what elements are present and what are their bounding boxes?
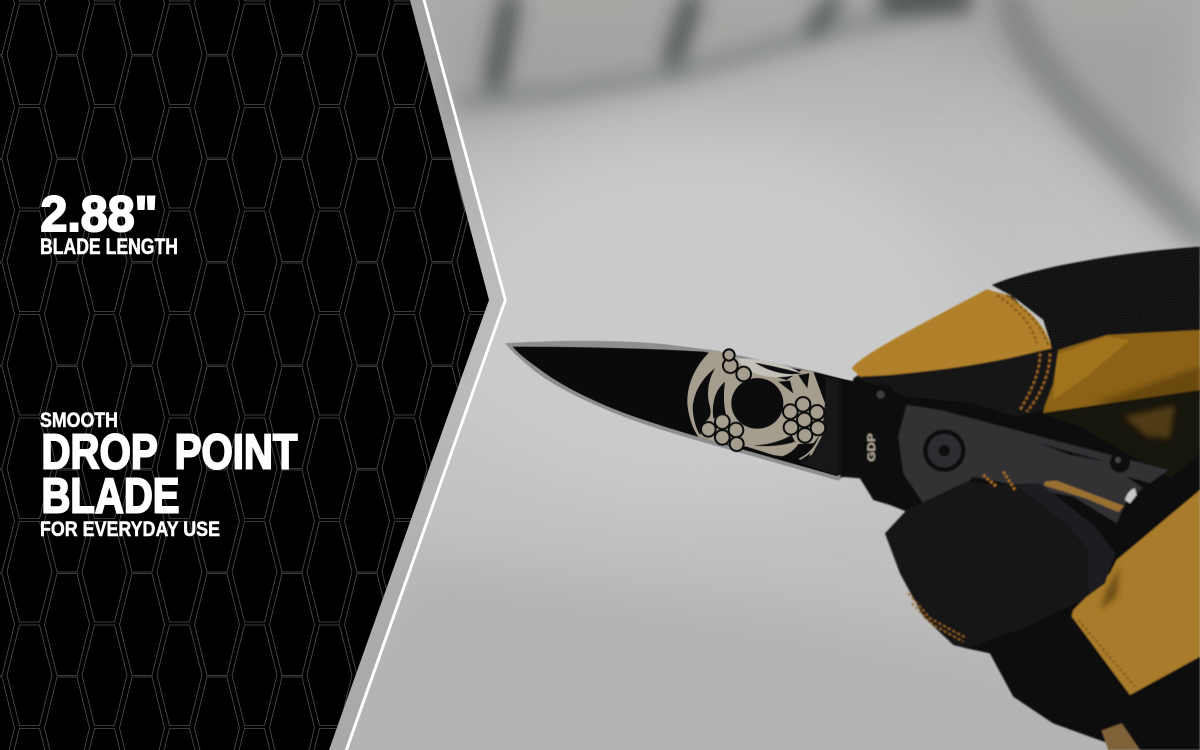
brand mark on blade: GDP: [866, 433, 878, 462]
cuff stitches: [1078, 620, 1135, 687]
feature: drop point blade: [40, 408, 298, 541]
knife handle: [885, 405, 1168, 523]
cuff suede: [1071, 490, 1200, 695]
heading: drop point: DROP POINT: [42, 424, 298, 480]
index fingertip suede: [852, 289, 1052, 377]
white chevron line: [345, 0, 507, 750]
index fingertip leather: [857, 350, 1058, 417]
value: 2.88 inches: 2.88": [40, 186, 158, 242]
lower palm: [990, 615, 1200, 750]
photo: gloved hand holding knife handle: [840, 247, 1200, 750]
handle tan accent: [1044, 481, 1124, 512]
thumb: [885, 472, 1115, 648]
blade etched logo: [687, 349, 825, 460]
panel: black chevron with hexagon pattern: [0, 0, 489, 750]
fingertip stitches: [997, 295, 1050, 412]
label: blade length: BLADE LENGTH: [40, 234, 178, 259]
stat: blade length: [40, 186, 178, 259]
chevron gray band: [329, 0, 505, 750]
glove back mesh: [992, 247, 1200, 352]
handle screws: [870, 384, 1130, 473]
heading: blade: BLADE: [42, 468, 180, 524]
logo mark on handle: [1125, 488, 1137, 503]
label: for everyday use: FOR EVERYDAY USE: [40, 517, 220, 541]
label: smooth: SMOOTH: [40, 408, 118, 432]
photo: knife blade: [505, 341, 873, 481]
dark palm interior: [1040, 390, 1200, 480]
blade base: [840, 380, 890, 505]
hand silhouette: [853, 290, 1200, 750]
wrist strap: [1108, 453, 1200, 560]
tan palm shading: [1043, 330, 1200, 413]
